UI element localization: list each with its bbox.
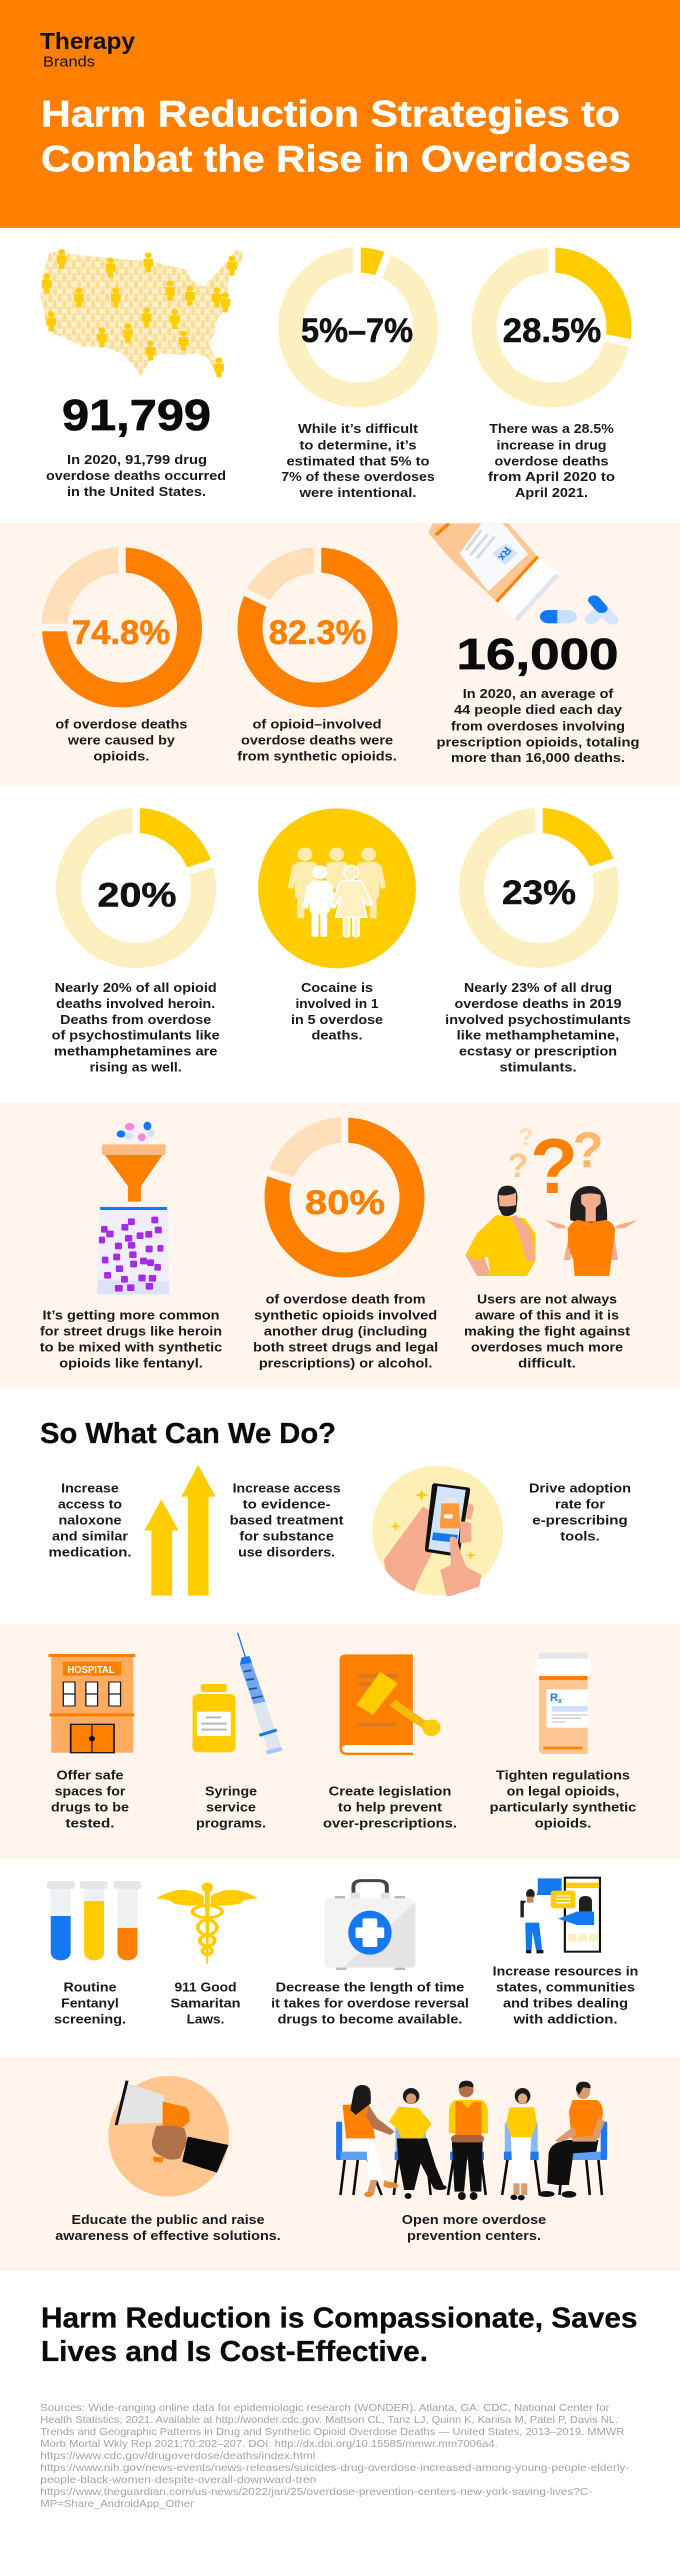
- text: e-prescribing tools: [529, 1480, 631, 1543]
- text: safe spaces: tested.: [66, 1815, 114, 1830]
- panel: opioid statistics: [0, 520, 680, 786]
- text: synthetic opioids: overdose deaths were: [241, 733, 393, 748]
- icon: group of people in yellow circle: [258, 808, 416, 968]
- text: overdose prevention centers: Open more overdose: [402, 2212, 546, 2227]
- text: prescription opioid deaths: [436, 686, 640, 765]
- text: syringe service programs: programs.: [196, 1815, 266, 1830]
- text: tighten regulations: opioids.: [535, 1815, 591, 1830]
- text block: sources: Morb Mortal Wkly Rep 2021;70:202–207. DOI: http://dx.doi.org/10.15585/mmwr.mm7006a4.: [40, 2438, 498, 2450]
- text block: sources: https://www.theguardian.com/us-news/2022/jan/25/overdose-prevention-centers-new-york-saving-lives?C-: [40, 2486, 593, 2498]
- big number 16,000: 16,000: [456, 630, 618, 679]
- icon: prescription bottle: [536, 1653, 591, 1754]
- icon: hospital building: [49, 1654, 135, 1753]
- text: overdose prevention centers: [402, 2212, 546, 2243]
- figure: person five: [538, 2082, 605, 2198]
- text: increase resources: and tribes dealing: [503, 1995, 628, 2010]
- donut chart: 5%-7% intentional: [290, 244, 426, 395]
- text: reversal drugs availability: Decrease the length of time: [276, 1979, 464, 1994]
- icon: confused man and woman with question marks: ?: [519, 1124, 533, 1151]
- figure: person two: [389, 2088, 447, 2199]
- text: heroin and psychostimulants: deaths involved heroin.: [56, 996, 215, 1011]
- text: syringe service programs: service: [206, 1799, 256, 1814]
- donut chart: 23% psychostimulants: 23%: [502, 874, 576, 912]
- text: caused by opioids: were caused by: [67, 733, 176, 748]
- text: overdose deaths in 2020: In 2020, 91,799 drug: [67, 452, 207, 467]
- text: 28.5% increase: April 2021.: [515, 485, 588, 500]
- heading: closing statement: Lives and Is Cost-Effective.: [41, 2336, 428, 2368]
- text: intentional overdoses: 7% of these overdoses: [281, 469, 435, 484]
- panel: national overdose statistics: [39, 244, 634, 500]
- text: 28.5% increase: increase in drug: [496, 438, 607, 452]
- icon: first aid kit: [324, 1881, 415, 1970]
- text: legislation: [323, 1783, 457, 1830]
- arrows: two upward arrows: [144, 1465, 216, 1596]
- figure: person one: [343, 2085, 399, 2197]
- text block: sources: Trends and Geographic Patterns in Drug and Synthetic Opioid Overdose Deaths — United States, 2013–2019. MMWR: [40, 2426, 625, 2438]
- text: reversal drugs availability: it takes for overdose reversal: [271, 1995, 469, 2010]
- text: reversal drugs availability: drugs to become available.: [278, 2011, 462, 2026]
- text: cocaine involvement: deaths.: [312, 1028, 362, 1043]
- icon: confused man and woman with question marks: ?: [573, 1122, 603, 1178]
- donut chart: 74.8% opioids: 74.8%: [72, 614, 170, 652]
- text: legislation: Create legislation: [329, 1783, 451, 1798]
- heading: So What Can We Do?: So What Can We Do?: [40, 1418, 336, 1450]
- text: other drugs involved: both street drugs and legal: [253, 1340, 438, 1355]
- text: e-prescribing tools: rate for: [555, 1496, 605, 1511]
- text: naloxone access: medication.: [48, 1544, 132, 1559]
- text: increase resources: states, communities: [496, 1979, 635, 1994]
- title: Harm Reduction Strategies to: [41, 94, 620, 135]
- text: evidence-based treatment: to evidence-: [243, 1496, 331, 1511]
- text: prescription opioid deaths: more than 16,000 deaths.: [451, 750, 625, 765]
- text: users unaware: overdoses much more: [471, 1340, 623, 1355]
- text block: sources: https://www.nih.gov/news-events/news-releases/suicides-drug-overdose-increased-among-young-people-elderly-: [40, 2462, 630, 2474]
- text: legislation: to help prevent: [338, 1799, 443, 1814]
- text: fentanyl screening: Fentanyl: [61, 1995, 119, 2010]
- text: naloxone access: naloxone: [58, 1512, 122, 1527]
- text: 28.5% increase: [488, 421, 615, 500]
- text: psychostimulant deaths: stimulants.: [500, 1060, 576, 1074]
- text: other drugs involved: [253, 1292, 438, 1371]
- text: safe spaces: drugs to be: [51, 1799, 129, 1814]
- panel: screening, samaritan laws, reversal drugs, resources: [47, 1877, 638, 2026]
- logo: Therapy Brands: Therapy: [40, 28, 135, 54]
- text: educate the public: Educate the public and raise: [72, 2212, 264, 2227]
- panel: so what can we do: [40, 1418, 631, 1597]
- icon: hand holding phone with e-prescription: [372, 1466, 503, 1597]
- text: intentional overdoses: estimated that 5% to: [286, 454, 430, 468]
- figure: person three: [449, 2081, 488, 2200]
- text block: sources: [40, 2402, 630, 2510]
- text: naloxone access: access to: [58, 1496, 122, 1511]
- text: cocaine involvement: in 5 overdose: [291, 1012, 383, 1027]
- text: users unaware: Users are not always: [477, 1292, 617, 1307]
- text: prescription opioid deaths: from overdoses involving: [451, 718, 625, 733]
- text: psychostimulant deaths: like methamphetamine,: [457, 1028, 619, 1043]
- text: overdose deaths in 2020: [46, 452, 226, 499]
- text: safe spaces: spaces for: [55, 1783, 125, 1798]
- icon: confused man and woman with question marks: ?: [530, 1122, 578, 1210]
- text: overdose deaths in 2020: overdose deaths occurred: [46, 468, 226, 483]
- text: evidence-based treatment: for substance: [239, 1528, 334, 1543]
- text: synthetic opioids: from synthetic opioids.: [237, 749, 397, 764]
- text: reversal drugs availability: [271, 1979, 469, 2026]
- heading: closing statement: [41, 2303, 638, 2368]
- text block: sources: MP=Share_AndroidApp_Other: [40, 2498, 194, 2510]
- text: synthetic opioids: of opioid–involved: [252, 717, 382, 732]
- text: legislation: over-prescriptions.: [323, 1815, 457, 1830]
- donut chart: 28.5% increase: [484, 244, 634, 395]
- text: psychostimulant deaths: involved psychostimulants: [445, 1012, 631, 1027]
- text: evidence-based treatment: based treatment: [230, 1512, 344, 1527]
- text: other drugs involved: another drug (including: [264, 1324, 427, 1339]
- icon: caduceus: [156, 1882, 258, 1964]
- text: syringe service programs: Syringe: [205, 1783, 257, 1798]
- panel: education and prevention centers: [0, 2057, 680, 2271]
- logo: Therapy Brands: [40, 28, 135, 70]
- text: tighten regulations: on legal opioids,: [507, 1783, 619, 1798]
- text: street drugs mixed with fentanyl: [40, 1308, 222, 1371]
- icon: law book and gavel: [340, 1654, 441, 1755]
- text: heroin and psychostimulants: Deaths from overdose: [60, 1012, 211, 1027]
- text: overdose prevention centers: prevention centers.: [407, 2228, 541, 2243]
- text: caused by opioids: of overdose deaths: [55, 717, 187, 732]
- title: Combat the Rise in Overdoses: [41, 139, 631, 180]
- text: cocaine involvement: [291, 980, 383, 1043]
- logo: Therapy Brands: Brands: [43, 54, 95, 70]
- text: heroin and psychostimulants: methamphetamines are: [54, 1044, 217, 1059]
- icon: person using telehealth on large phone: [520, 1877, 601, 1953]
- donut chart: 80% polydrug: 80%: [305, 1184, 385, 1222]
- text: psychostimulant deaths: ecstasy or prescription: [459, 1044, 617, 1059]
- text: prescription opioid deaths: In 2020, an average of: [463, 686, 614, 701]
- donut chart: 82.3% synthetic: [227, 537, 408, 718]
- text: naloxone access: and similar: [52, 1528, 128, 1543]
- text: e-prescribing tools: e-prescribing: [532, 1512, 628, 1527]
- text: intentional overdoses: While it’s difficult: [298, 421, 419, 436]
- text: tighten regulations: [490, 1767, 636, 1830]
- icon: prescription bottle: R: [550, 1692, 558, 1704]
- icon: confused man and woman with question marks: [465, 1122, 637, 1276]
- text: naloxone access: Increase: [61, 1480, 119, 1495]
- title: [41, 94, 631, 180]
- text: fentanyl screening: [54, 1979, 126, 2026]
- text: users unaware: difficult.: [518, 1356, 576, 1371]
- text: heroin and psychostimulants: rising as well.: [90, 1060, 182, 1074]
- text: prescription opioid deaths: 44 people died each day: [454, 702, 623, 717]
- text: other drugs involved: synthetic opioids involved: [254, 1308, 437, 1323]
- text: other drugs involved: prescriptions) or alcohol.: [259, 1356, 432, 1371]
- heading: closing statement: Harm Reduction is Compassionate, Saves: [41, 2303, 638, 2335]
- text: evidence-based treatment: Increase access: [233, 1480, 341, 1495]
- text: e-prescribing tools: tools.: [560, 1528, 600, 1543]
- text: psychostimulant deaths: Nearly 23% of all drug: [464, 980, 612, 995]
- text: cocaine involvement: involved in 1: [296, 996, 378, 1011]
- donut chart: 82.3% synthetic: 82.3%: [269, 614, 366, 652]
- big number 91,799: 91,799: [62, 391, 211, 440]
- icon: hand holding megaphone: [108, 2076, 229, 2197]
- text: good samaritan laws: 911 Good: [174, 1979, 237, 1994]
- text: caused by opioids: [55, 717, 187, 764]
- text: evidence-based treatment: [230, 1480, 344, 1559]
- text block: sources: Sources: Wide-ranging online data for epidemiologic research (WONDER). Atlanta, GA: CDC, National Center for: [40, 2402, 610, 2414]
- text block: sources: people-black-women-despite-overall-downward-tren: [40, 2474, 316, 2486]
- text: fentanyl screening: Routine: [64, 1979, 116, 1994]
- panel: heroin, cocaine and psychostimulants: [52, 804, 631, 1074]
- text: street drugs mixed with fentanyl: opioids like fentanyl.: [59, 1356, 203, 1371]
- icon: test tubes: [47, 1881, 141, 1960]
- text: e-prescribing tools: Drive adoption: [529, 1480, 631, 1495]
- panel: synthetic opioid mixing: [0, 1103, 680, 1388]
- text: naloxone access: [48, 1480, 132, 1559]
- text: users unaware: making the fight against: [464, 1324, 631, 1339]
- text: increase resources: Increase resources in: [493, 1963, 638, 1978]
- donut chart: 20% heroin: 20%: [98, 876, 176, 914]
- icon: confused man and woman with question marks: ?: [508, 1147, 528, 1185]
- text: street drugs mixed with fentanyl: for street drugs like heroin: [40, 1324, 222, 1339]
- icon: spilled prescription bottle and capsules: [428, 520, 612, 623]
- text: educate the public: awareness of effective solutions.: [55, 2228, 281, 2243]
- icon: spilled prescription bottle and capsules: Rx: [495, 544, 513, 563]
- text: users unaware: [464, 1292, 631, 1371]
- text: street drugs mixed with fentanyl: to be mixed with synthetic: [40, 1340, 222, 1355]
- text: overdose deaths in 2020: in the United States.: [67, 484, 206, 499]
- panel: safe spaces, syringes, legislation, regulations: [0, 1624, 680, 1859]
- text: prescription opioid deaths: prescription opioids, totaling: [436, 734, 640, 749]
- text: good samaritan laws: Samaritan: [170, 1995, 241, 2010]
- text: syringe service programs: [196, 1783, 266, 1830]
- icon: vial and syringe: [193, 1633, 282, 1753]
- text: psychostimulant deaths: [445, 980, 631, 1074]
- donut chart: 5%-7% intentional: 5%–7%: [301, 312, 413, 350]
- donut chart: 74.8% opioids: [38, 544, 190, 695]
- text: safe spaces: Offer safe: [56, 1767, 124, 1782]
- text: evidence-based treatment: use disorders.: [238, 1544, 335, 1559]
- text: other drugs involved: of overdose death from: [266, 1292, 426, 1307]
- text: 28.5% increase: overdose deaths: [494, 454, 608, 468]
- panel: header: [0, 0, 680, 228]
- text: caused by opioids: opioids.: [93, 749, 149, 764]
- text: increase resources: with addiction.: [512, 2011, 618, 2026]
- text: increase resources: [493, 1963, 638, 2026]
- text block: sources: https://www.cdc.gov/drugoverdose/deaths/index.html: [40, 2450, 315, 2462]
- text: street drugs mixed with fentanyl: It’s getting more common: [42, 1308, 220, 1323]
- text: tighten regulations: Tighten regulations: [496, 1767, 630, 1782]
- text: good samaritan laws: [170, 1979, 241, 2026]
- donut chart: 28.5% increase: 28.5%: [503, 312, 601, 350]
- text: synthetic opioids: [237, 717, 397, 764]
- text: cocaine involvement: Cocaine is: [301, 980, 373, 995]
- text: psychostimulant deaths: overdose deaths in 2019: [454, 996, 622, 1011]
- text: 28.5% increase: from April 2020 to: [488, 469, 615, 484]
- text: tighten regulations: particularly synthetic: [490, 1799, 636, 1814]
- text: safe spaces: [51, 1767, 129, 1830]
- text: intentional overdoses: were intentional.: [298, 485, 416, 500]
- illustration: five people seated in support circle: [336, 2081, 607, 2200]
- text: good samaritan laws: Laws.: [187, 2011, 224, 2026]
- text: intentional overdoses: to determine, it’s: [300, 438, 416, 452]
- icon: funnel over bag of pills: [97, 1121, 169, 1294]
- map: United States made of people figures: [39, 248, 245, 377]
- text: heroin and psychostimulants: [52, 980, 220, 1074]
- text: educate the public: [55, 2212, 281, 2243]
- text: intentional overdoses: [281, 421, 435, 500]
- donut chart: 20% heroin: [68, 804, 216, 956]
- figure: person four: [506, 2088, 537, 2200]
- donut chart: 80% polydrug: [259, 1112, 430, 1283]
- icon: prescription bottle: x: [558, 1698, 562, 1705]
- icon: hospital building: HOSPITAL: [68, 1665, 114, 1676]
- donut chart: 23% psychostimulants: [472, 804, 618, 956]
- text: heroin and psychostimulants: Nearly 20% of all opioid: [55, 980, 217, 995]
- text: heroin and psychostimulants: of psychostimulants like: [52, 1028, 220, 1043]
- text: users unaware: aware of this and it is: [475, 1308, 619, 1323]
- text block: sources: Health Statistics; 2021. Available at http://wonder.cdc.gov. Mattson CL, Tanz LJ, Quinn K, Kariisa M, Patel P, Davis NL.: [40, 2414, 618, 2426]
- text: fentanyl screening: screening.: [54, 2011, 126, 2026]
- text: 28.5% increase: There was a 28.5%: [489, 421, 614, 436]
